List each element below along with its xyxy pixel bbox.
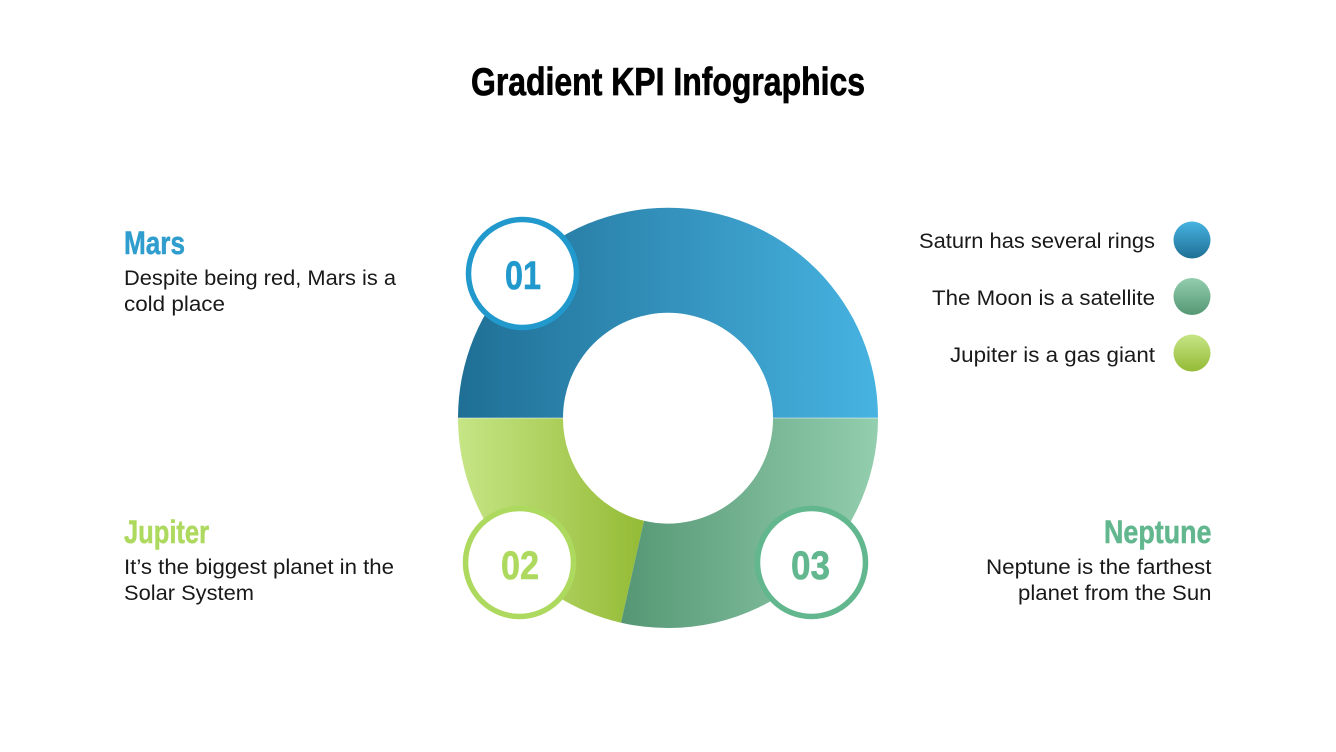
legend item: Moon: The Moon is a satellite — [932, 286, 1155, 310]
text block: Jupiter: Jupiter — [124, 514, 209, 550]
legend item: Saturn — [919, 222, 1210, 258]
badge 03: 03 — [791, 544, 830, 588]
segment: green lower right — [621, 418, 878, 628]
badge 03 — [758, 508, 866, 616]
badge 02: 02 — [501, 544, 539, 588]
text block: Neptune: Neptune — [1104, 514, 1212, 550]
text block: Mars: cold place — [124, 292, 225, 316]
text block: Mars — [124, 225, 396, 316]
text block: Jupiter: Solar System — [124, 581, 254, 605]
legend item: Jupiter — [950, 334, 1210, 372]
segment: light green lower left — [458, 418, 644, 623]
text block: Neptune — [986, 514, 1212, 605]
legend — [919, 222, 1210, 372]
legend item: Saturn: Saturn has several rings — [919, 229, 1155, 253]
text block: Mars: Mars — [124, 225, 185, 261]
donut chart — [458, 208, 878, 628]
title: Gradient KPI Infographics — [471, 61, 865, 104]
text block: Neptune: planet from the Sun — [1018, 581, 1212, 605]
text block: Jupiter: It’s the biggest planet in the — [124, 555, 394, 579]
badge 01 — [468, 220, 576, 328]
badge 02 — [466, 508, 574, 616]
text block: Neptune: Neptune is the farthest — [986, 555, 1212, 579]
text block: Mars: Despite being red, Mars is a — [124, 266, 396, 290]
legend item: Jupiter: Jupiter is a gas giant — [950, 343, 1155, 367]
badge 01: 01 — [505, 254, 541, 298]
legend item: Moon — [932, 278, 1210, 315]
text block: Jupiter — [124, 514, 394, 605]
segment: blue top half — [458, 208, 878, 418]
